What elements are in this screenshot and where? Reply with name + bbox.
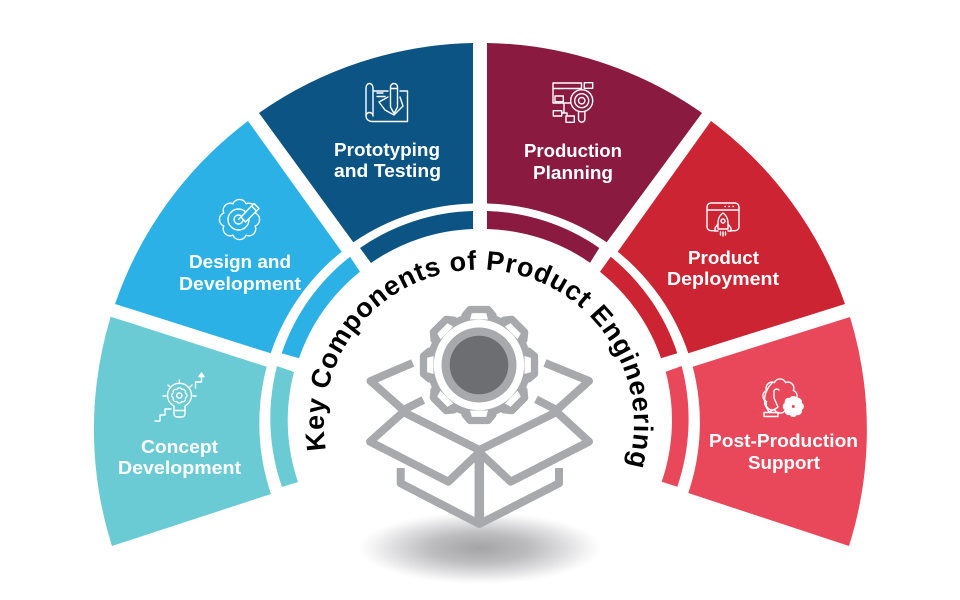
label: concept development: Development [118,458,241,478]
label: design and development: Development [179,274,301,294]
label: design and development: Design and [189,252,291,272]
label: post-production support: Support [748,453,820,473]
label: product deployment: Product [688,248,759,268]
box [370,363,589,525]
icon: blueprint and pencil [366,84,408,122]
panel: prototyping and testing [259,43,473,263]
panel: post-production support [662,317,867,546]
label: production planning: Production [524,141,622,161]
label: concept development: Concept [141,437,218,457]
gear [424,310,534,420]
panel: product deployment [600,121,845,358]
ground shadow [358,512,602,584]
icon: plan with target and boxes [553,83,593,122]
panel: design and development [115,121,360,358]
curved title: Key Components of Product Engineering [305,250,654,468]
label: product deployment: Deployment [667,269,779,289]
label: production planning: Planning [533,163,613,183]
icon: hand with gears [763,379,803,417]
label: prototyping and testing: and Testing [334,161,441,181]
label: post-production support: Post-Production [709,431,858,451]
icon: light bulb with gear and steps [155,373,204,421]
icon: browser window with rocket [707,203,739,236]
icon: gear with target and pencil [219,199,260,240]
panel: concept development [94,317,298,546]
label: prototyping and testing: Prototyping [334,140,440,160]
panel: production planning [487,43,702,263]
icon: open box with gear [370,310,589,525]
